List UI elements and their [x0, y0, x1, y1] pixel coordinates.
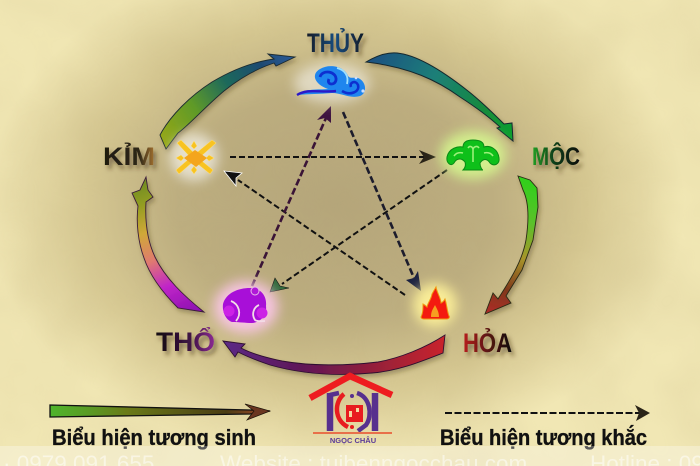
label: Hỏa: HỎA: [463, 326, 512, 358]
legend arrow: controlling relation: [445, 405, 650, 421]
label: Thổ: THỔ: [156, 326, 215, 357]
cycle arrow: Kim to Thủy: [160, 54, 295, 149]
label: Kim: KỈM: [103, 141, 155, 171]
cycle arrow: Hỏa to Thổ: [223, 335, 445, 374]
watermark strip: [0, 446, 700, 466]
dashed arrow: Kim to Mộc: [230, 150, 436, 164]
cycle arrow: Thủy to Mộc: [366, 53, 513, 141]
legend text: generating: Biểu hiện tương sinh: [52, 425, 256, 450]
dashed arrow: Thủy to Hỏa: [343, 112, 421, 291]
icon: fire flame: [413, 283, 457, 327]
star of controlling relations (dashed arrows): [224, 106, 447, 295]
icon: water cloud swirl: [294, 63, 370, 103]
label: Thủy: THỦY: [307, 26, 364, 58]
icon: wood leaf: [440, 131, 506, 179]
cycle arrow: Mộc to Hỏa: [485, 176, 538, 314]
legend arrow: generating relation: [50, 404, 270, 420]
icon: metal sun: [170, 133, 218, 181]
dashed arrow: Hỏa to Kim: [224, 171, 405, 295]
logo caption: NGỌC CHÂU: [330, 436, 376, 445]
logo emblem: [330, 393, 375, 431]
icon: earth purple disc: [214, 281, 278, 333]
dashed arrow: Thổ to Thủy: [252, 106, 331, 286]
logo: Ngọc Châu house: [310, 376, 392, 445]
logo roof: [310, 376, 392, 398]
legend text: controlling: Biểu hiện tương khắc: [440, 425, 647, 450]
cycle arrow: Thổ to Kim: [132, 177, 204, 312]
label: Mộc: MỘC: [532, 141, 580, 171]
dashed arrow: Mộc to Thổ: [270, 170, 447, 292]
logo baseline: [313, 432, 392, 434]
